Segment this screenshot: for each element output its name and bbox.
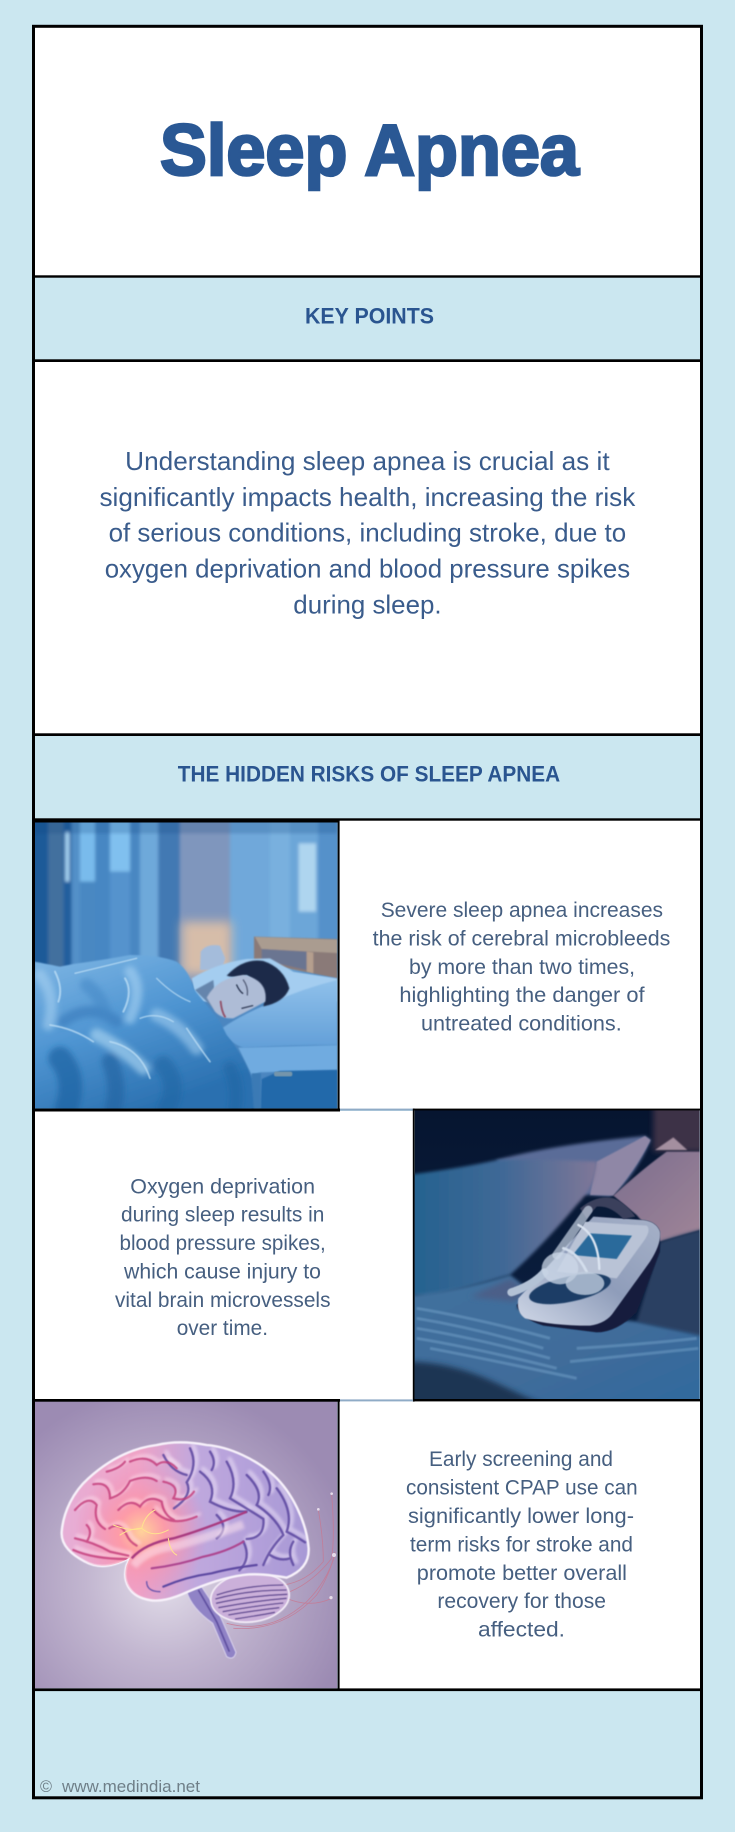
intro text: during sleep. [293,589,442,619]
sheet [407,1275,707,1405]
cerebellum [209,1576,290,1624]
mask and tubing [511,1210,599,1292]
vase [200,945,225,970]
panel: hidden risks heading [35,735,700,819]
device strap [580,1197,635,1219]
image: brain illustration [35,1401,337,1688]
intro text: significantly impacts health, increasing the risk [100,482,636,512]
text: early screening: promote better overall [417,1562,627,1585]
front pillow [222,980,337,1048]
duvet creases [50,958,210,1078]
intro text: of serious conditions, including stroke, due to [109,518,626,548]
heading: hidden risks: THE HIDDEN RISKS OF SLEEP APNEA [178,762,560,787]
sheet shadow lower left [414,1358,538,1399]
text: microbleeds: Severe sleep apnea increases [381,899,663,922]
hair [227,960,289,1006]
text: early screening: Early screening and [429,1448,613,1471]
text: microbleeds: by more than two times, [409,956,635,979]
curtains [30,815,342,982]
headboard [254,937,337,978]
sylvian fissure [132,1512,247,1558]
device dial [528,1273,612,1305]
heading: key points: KEY POINTS [305,304,434,328]
panel: row 2 text [35,1111,413,1400]
image: CPAP machine on bed [407,1105,707,1405]
bed sheet [238,1045,337,1075]
stroke glow and folds [73,1445,308,1598]
image: person sleeping [30,815,342,1112]
footer band [35,1691,700,1797]
text: oxygen deprivation: vital brain microvessels [115,1289,330,1312]
gyrus highlights left [76,1456,199,1556]
face [207,975,266,1018]
watermark: www.medindia.net [61,1777,200,1796]
device base [517,1217,660,1332]
duvet [35,955,254,1112]
text: oxygen deprivation: which cause injury to [123,1260,321,1283]
mask cushions [542,1252,604,1295]
nerve end dots [317,1492,336,1599]
device top bezel [557,1222,649,1278]
temporal sulci [147,1542,257,1592]
device shell [518,1217,660,1326]
duvet soft folds [40,972,236,1108]
text: early screening: significantly lower long- [408,1505,634,1528]
text: early screening [406,1448,638,1642]
pink sulci [73,1459,197,1559]
text: oxygen deprivation: during sleep results in [121,1204,324,1227]
back pillow [192,958,337,1002]
text: early screening: affected. [478,1619,565,1642]
curtain top shade [48,822,337,834]
text: microbleeds: the risk of cerebral microbleeds [373,928,670,951]
device screen [573,1233,632,1259]
watermark: © [40,1777,52,1796]
text: oxygen deprivation: Oxygen deprivation [130,1175,315,1198]
text: oxygen deprivation: blood pressure spikes, [120,1232,326,1255]
cerebrum [62,1442,309,1601]
panel: title [35,27,700,276]
text: oxygen deprivation: over time. [177,1317,268,1340]
facial features [221,980,253,1017]
text: oxygen deprivation [115,1175,330,1340]
nightstand [260,1070,337,1112]
text: microbleeds: untreated conditions. [421,1013,622,1036]
panel: row 3 text [339,1401,700,1689]
intro text [100,446,636,619]
nerve fibres [227,1495,335,1629]
text: early screening: recovery for those [437,1590,606,1613]
sheet ribs [417,1308,698,1378]
headboard shadow [650,1110,700,1154]
right pillow [613,1152,707,1242]
dark fold [637,1228,707,1338]
left pillow [407,1159,597,1297]
text: early screening: term risks for stroke and [410,1534,633,1557]
text: early screening: consistent CPAP use can [406,1477,638,1500]
yellow neural sparks [113,1510,177,1555]
intro text: oxygen deprivation and blood pressure spikes [105,553,630,583]
rear pillow [497,1136,651,1197]
gyrus highlights right [166,1445,308,1567]
text: microbleeds [373,899,670,1036]
intro text: Understanding sleep apnea is crucial as it [125,446,610,476]
temporal lobe highlight [133,1524,243,1566]
neck [195,980,215,1006]
lamp glow [182,922,232,975]
text: microbleeds: highlighting the danger of [399,984,645,1007]
grid lines [35,275,700,1691]
brain stem [187,1587,236,1658]
title: Sleep Apnea [160,111,580,191]
purple sulci [163,1448,305,1570]
panel: key points heading [35,277,700,360]
panel: row 1 text [339,820,700,1109]
panel: key points text [35,361,700,734]
